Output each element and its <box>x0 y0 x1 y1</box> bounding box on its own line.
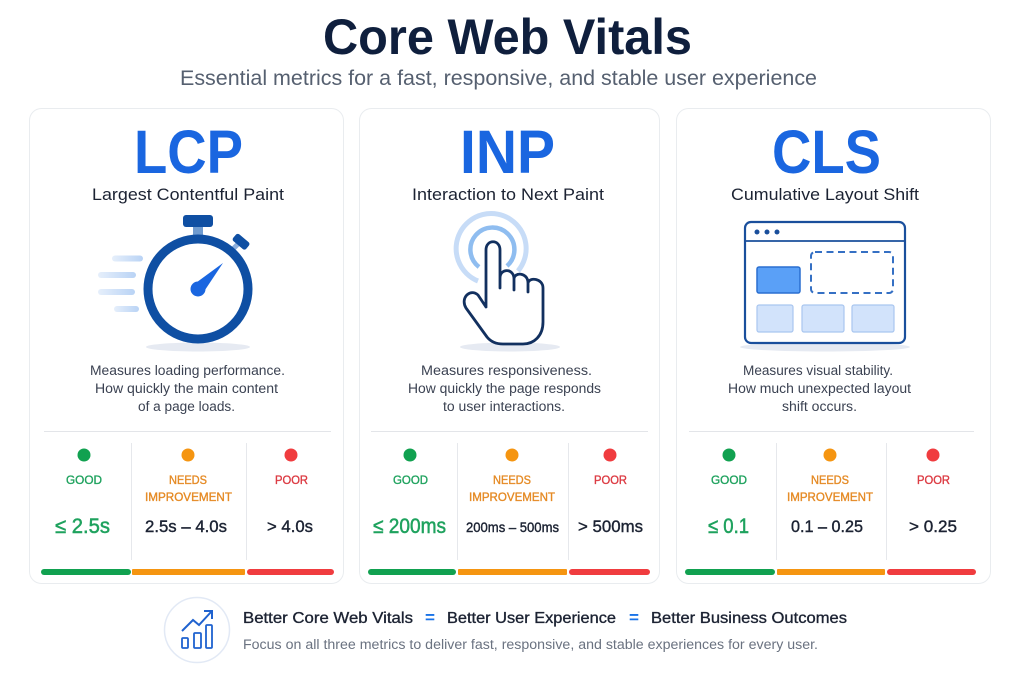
heading: INP: INP <box>460 118 555 186</box>
rating: needs improvement <box>145 448 233 536</box>
rating: needs improvement: IMPROVEMENT <box>145 490 233 504</box>
rating: good: GOOD <box>393 473 428 487</box>
icon: growth chart <box>164 598 230 662</box>
icon: pointing hand <box>456 214 560 352</box>
rating: poor <box>578 448 643 536</box>
rating: poor: > 0.25 <box>909 517 957 536</box>
status bar: CLS <box>685 569 976 575</box>
rating: needs improvement: 200ms – 500ms <box>466 519 559 535</box>
rating: good: GOOD <box>66 473 102 487</box>
rating: good: GOOD <box>711 473 747 487</box>
description: CLS: Measures visual stability. <box>743 363 893 378</box>
rating: poor: > 4.0s <box>267 517 313 536</box>
rating: needs improvement: IMPROVEMENT <box>787 490 874 504</box>
footer headline: = <box>629 608 639 627</box>
rating: needs improvement: 2.5s – 4.0s <box>145 517 227 536</box>
icon: browser layout <box>740 222 910 352</box>
description: INP: Measures responsiveness. <box>421 363 592 378</box>
subtitle: Essential metrics for a fast, responsive, and stable user experience <box>180 67 817 90</box>
footer headline: Better Core Web Vitals <box>243 610 413 627</box>
title: Core Web Vitals <box>323 9 692 65</box>
footer headline: Better Business Outcomes <box>651 610 847 627</box>
panel: LCP <box>30 108 344 584</box>
icon: stopwatch <box>98 215 250 352</box>
description: CLS: How much unexpected layout <box>728 381 911 396</box>
rating: good <box>55 448 110 538</box>
description: CLS <box>728 363 911 414</box>
rating: poor: POOR <box>275 473 308 487</box>
description: INP: to user interactions. <box>443 399 565 414</box>
subheading: CLS: Cumulative Layout Shift <box>731 185 919 204</box>
rating: good: ≤ 2.5s <box>55 515 110 538</box>
footer note: Focus on all three metrics to deliver fast, responsive, and stable experiences for every user. <box>243 637 818 652</box>
footer headline: = <box>425 608 435 627</box>
subheading: INP: Interaction to Next Paint <box>412 185 604 204</box>
rating: good <box>708 448 749 538</box>
rating: needs improvement <box>466 448 559 535</box>
description: LCP <box>90 363 285 414</box>
rating: good: ≤ 200ms <box>373 515 446 538</box>
subheading: LCP: Largest Contentful Paint <box>92 185 284 204</box>
rating: needs improvement <box>787 448 874 536</box>
heading: LCP: LCP <box>134 118 243 186</box>
footer headline: Better User Experience <box>447 610 616 627</box>
rating: good: ≤ 0.1 <box>708 515 749 538</box>
rating: poor: > 500ms <box>578 517 643 536</box>
footer headline <box>243 608 847 627</box>
rating: needs improvement: IMPROVEMENT <box>469 490 556 504</box>
rating: needs improvement: NEEDS <box>811 473 849 487</box>
rating: poor <box>909 448 957 536</box>
rating: needs improvement: NEEDS <box>169 473 207 487</box>
rating: poor: POOR <box>594 473 627 487</box>
status bar: INP <box>368 569 650 575</box>
description: LCP: Measures loading performance. <box>90 363 285 378</box>
rating: poor: POOR <box>917 473 950 487</box>
description: LCP: How quickly the main content <box>95 381 278 396</box>
status bar: LCP <box>41 569 334 575</box>
rating: poor <box>267 448 313 536</box>
panel: CLS <box>676 108 990 584</box>
description: INP <box>408 363 601 414</box>
rating: good <box>373 448 446 538</box>
rating: needs improvement: 0.1 – 0.25 <box>791 517 863 536</box>
heading: CLS: CLS <box>772 118 881 186</box>
description: LCP: of a page loads. <box>138 399 235 414</box>
description: CLS: shift occurs. <box>782 399 857 414</box>
rating: needs improvement: NEEDS <box>493 473 531 487</box>
description: INP: How quickly the page responds <box>408 381 601 396</box>
panel: INP <box>360 108 660 584</box>
